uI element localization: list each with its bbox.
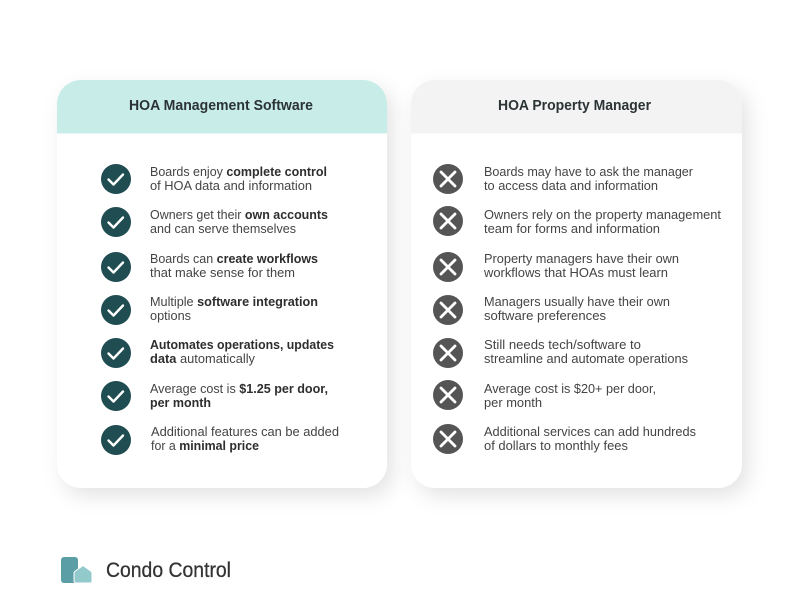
drawback row 3 (433, 251, 679, 282)
benefit row 7: for a minimal price (151, 438, 259, 453)
panel: HOA Management Software (57, 80, 387, 488)
benefit row 3: that make sense for them (150, 265, 295, 280)
benefit row 5: data automatically (150, 351, 255, 366)
drawback row 2: Owners rely on the property management (484, 207, 721, 222)
benefit row 1: Boards enjoy complete control (150, 164, 327, 179)
drawback row 6: Average cost is $20+ per door, (484, 381, 656, 396)
drawback row 3: Property managers have their own (484, 251, 679, 266)
panel header: property manager (411, 80, 742, 134)
drawback row 6 (433, 380, 656, 410)
heading: HOA Property Manager: HOA Property Manager (498, 98, 651, 114)
drawback row 3: workflows that HOAs must learn (483, 265, 668, 280)
benefit row 5 (101, 337, 334, 368)
drawback row 4: Managers usually have their own (484, 294, 670, 309)
benefit row 7: Additional features can be added (151, 424, 339, 439)
drawback row 7: Additional services can add hundreds (484, 424, 696, 439)
drawback row 2: team for forms and information (484, 221, 660, 236)
icon: building and house (61, 557, 92, 583)
drawback row 5: Still needs tech/software to (484, 337, 641, 352)
panel: HOA Property Manager (411, 80, 742, 488)
benefit row 1 (101, 164, 327, 194)
benefit row 1: of HOA data and information (150, 178, 312, 193)
benefit row 4 (101, 294, 318, 325)
drawback row 5: streamline and automate operations (484, 351, 688, 366)
benefit row 2 (101, 207, 328, 237)
benefit row 6 (101, 381, 328, 411)
benefit row 6: per month (150, 395, 211, 410)
benefit row 5: Automates operations, updates (150, 337, 334, 352)
logo: Condo Control (61, 557, 231, 583)
drawback row 2 (433, 206, 721, 236)
benefit row 2: and can serve themselves (150, 221, 296, 236)
benefit row 3: Boards can create workflows (150, 251, 318, 266)
benefit row 6: Average cost is $1.25 per door, (150, 381, 328, 396)
drawback row 5 (433, 337, 688, 368)
panel header: software (57, 80, 387, 134)
wordmark: Condo Control (106, 559, 231, 582)
drawback row 1: Boards may have to ask the manager (484, 164, 694, 179)
drawback row 7: of dollars to monthly fees (484, 438, 628, 453)
drawback row 4: software preferences (484, 308, 606, 323)
benefit row 4: options (150, 308, 191, 323)
benefit row 2: Owners get their own accounts (150, 207, 328, 222)
benefit row 7 (101, 424, 339, 455)
drawback row 1 (433, 164, 694, 194)
benefit row 3 (101, 251, 318, 282)
drawback row 7 (433, 424, 696, 454)
drawback row 1: to access data and information (484, 178, 658, 193)
benefit row 4: Multiple software integration (150, 294, 318, 309)
heading: HOA Management Software: HOA Management Software (129, 98, 313, 114)
drawback row 6: per month (484, 395, 542, 410)
drawback row 4 (433, 294, 670, 325)
